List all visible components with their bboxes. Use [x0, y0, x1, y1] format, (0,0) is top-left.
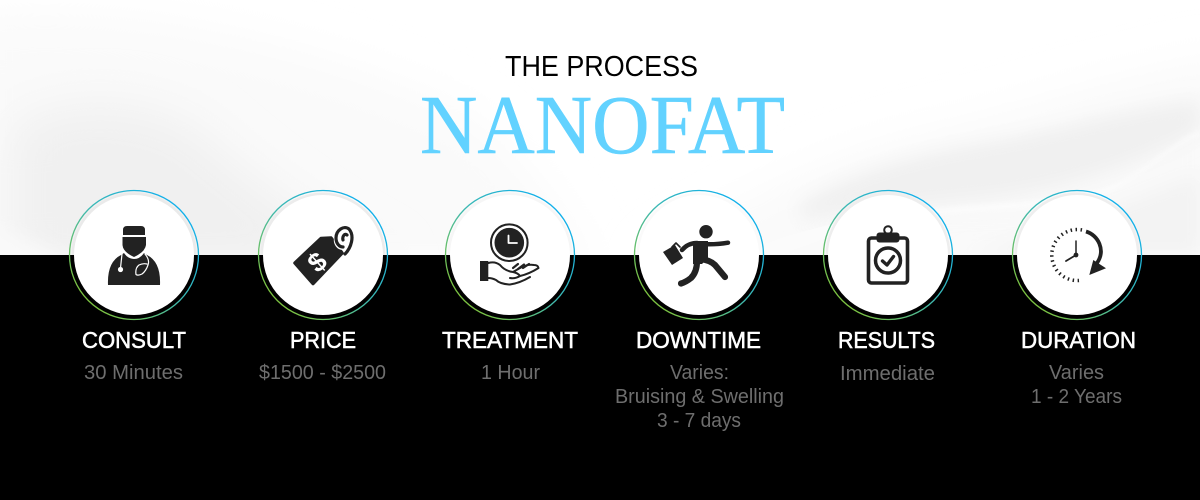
- heading: RESULTS: [838, 327, 935, 353]
- circle badge: [824, 190, 952, 320]
- value: Immediate: [840, 363, 935, 385]
- icon: hand holding clock: [480, 224, 538, 284]
- step: consult: [70, 190, 198, 384]
- value: Varies: [1049, 362, 1104, 384]
- value: Varies:: [670, 362, 729, 384]
- step: duration: [1012, 190, 1142, 408]
- title: nanofat: NANOFAT: [420, 79, 785, 172]
- circle badge: [446, 190, 574, 320]
- heading: TREATMENT: [442, 327, 578, 353]
- icon: running businessman: [663, 225, 728, 284]
- heading: the process: THE PROCESS: [505, 51, 698, 83]
- black lower panel: [0, 255, 1200, 500]
- value: Bruising & Swelling: [615, 386, 784, 408]
- step: price: [258, 190, 388, 384]
- step: results: [824, 190, 952, 385]
- value: 1 - 2 Years: [1031, 386, 1122, 408]
- heading: DURATION: [1021, 327, 1136, 353]
- circle badge: [258, 190, 388, 320]
- icon: clipboard with check: [868, 226, 908, 283]
- value: 30 Minutes: [84, 362, 183, 384]
- value: [615, 362, 784, 432]
- heading: CONSULT: [82, 327, 186, 353]
- icon: doctor: [108, 226, 160, 285]
- step: downtime: [615, 190, 784, 432]
- value: $1500 - $2500: [259, 362, 386, 384]
- value: [1031, 362, 1122, 408]
- icon: price tag: [295, 228, 352, 284]
- icon: clock with arrow: [1052, 230, 1106, 281]
- wavy light background: [0, 0, 1200, 255]
- circle badge: [70, 190, 198, 320]
- heading: PRICE: [290, 327, 356, 353]
- value: 3 - 7 days: [657, 410, 741, 432]
- value: 1 Hour: [481, 362, 540, 384]
- circle badge: [634, 190, 764, 320]
- heading: DOWNTIME: [636, 327, 761, 353]
- step: treatment: [442, 190, 578, 384]
- icon: price tag: $: [302, 246, 333, 278]
- circle badge: [1012, 190, 1142, 320]
